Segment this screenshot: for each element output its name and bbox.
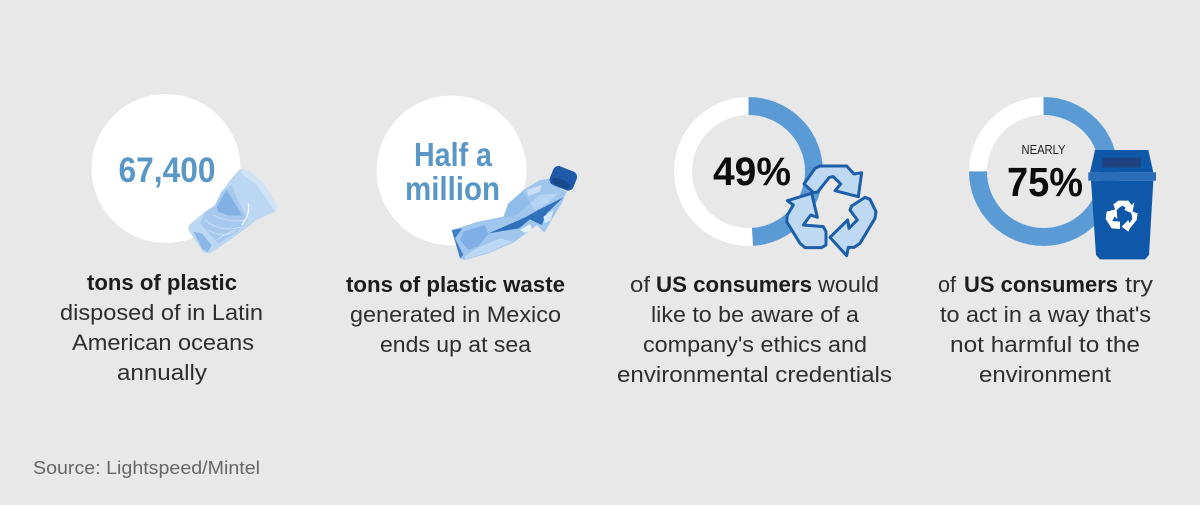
caption bbox=[60, 270, 263, 385]
caption: like to be aware of a bbox=[651, 302, 860, 327]
caption: environmental credentials bbox=[617, 362, 892, 387]
label: nearly: NEARLY bbox=[1022, 143, 1066, 157]
caption: American oceans bbox=[72, 330, 254, 355]
caption: tons of plastic bbox=[87, 270, 237, 295]
panel: nearly 75% of US consumers bbox=[938, 106, 1156, 387]
panel: 67,400 tons of plastic bbox=[60, 94, 278, 385]
caption bbox=[938, 272, 1153, 387]
stat: Half a million: million bbox=[405, 170, 500, 207]
caption bbox=[617, 272, 892, 387]
caption: generated in Mexico bbox=[350, 302, 561, 327]
panel: half a million tons of plastic waste bbox=[346, 96, 579, 357]
caption: try bbox=[1125, 272, 1153, 297]
stat: 67,400: 67,400 bbox=[118, 151, 216, 190]
caption: US consumers bbox=[656, 272, 812, 297]
caption: annually bbox=[117, 360, 207, 385]
caption: tons of plastic waste bbox=[346, 272, 565, 297]
caption: to act in a way that's bbox=[940, 302, 1151, 327]
caption: of bbox=[938, 272, 957, 297]
stat: Half a million: Half a bbox=[414, 136, 493, 173]
panel: 49% of US consumers bbox=[617, 106, 892, 387]
white circle bbox=[376, 96, 526, 246]
donut chart: 75% bbox=[978, 106, 1109, 237]
stat: 49%: 49% bbox=[713, 150, 791, 194]
caption bbox=[346, 272, 565, 357]
caption: US consumers bbox=[964, 272, 1118, 297]
icon: recycling arrows bbox=[787, 166, 876, 256]
stat: 75%: 75% bbox=[1007, 159, 1083, 205]
caption: of bbox=[630, 272, 651, 297]
caption: not harmful to the bbox=[950, 332, 1140, 357]
caption: disposed of in Latin bbox=[60, 300, 263, 325]
white circle bbox=[92, 94, 240, 243]
icon: crushed plastic cup bbox=[188, 169, 278, 253]
caption: company's ethics and bbox=[643, 332, 867, 357]
icon: blue recycling bin bbox=[1088, 150, 1156, 259]
stat: Half a million bbox=[405, 136, 500, 207]
icon: crushed plastic bottle bbox=[452, 164, 579, 260]
donut chart: 49% bbox=[683, 106, 814, 237]
caption: environment bbox=[979, 362, 1111, 387]
source note: Source: Lightspeed/Mintel bbox=[33, 458, 260, 478]
caption: ends up at sea bbox=[380, 332, 532, 357]
caption: would bbox=[817, 272, 879, 297]
